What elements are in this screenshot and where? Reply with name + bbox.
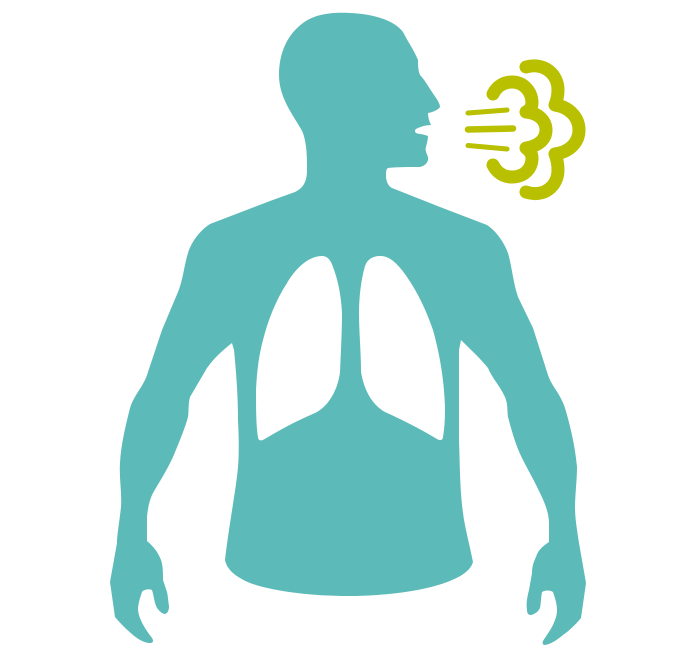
body silhouette <box>110 13 586 645</box>
inner breath puff <box>493 82 546 177</box>
outer breath puff <box>526 66 579 194</box>
left lung <box>256 256 342 440</box>
icon: exhaled breath cloud <box>468 66 579 194</box>
airflow lines <box>468 110 513 149</box>
right lung <box>359 256 445 440</box>
